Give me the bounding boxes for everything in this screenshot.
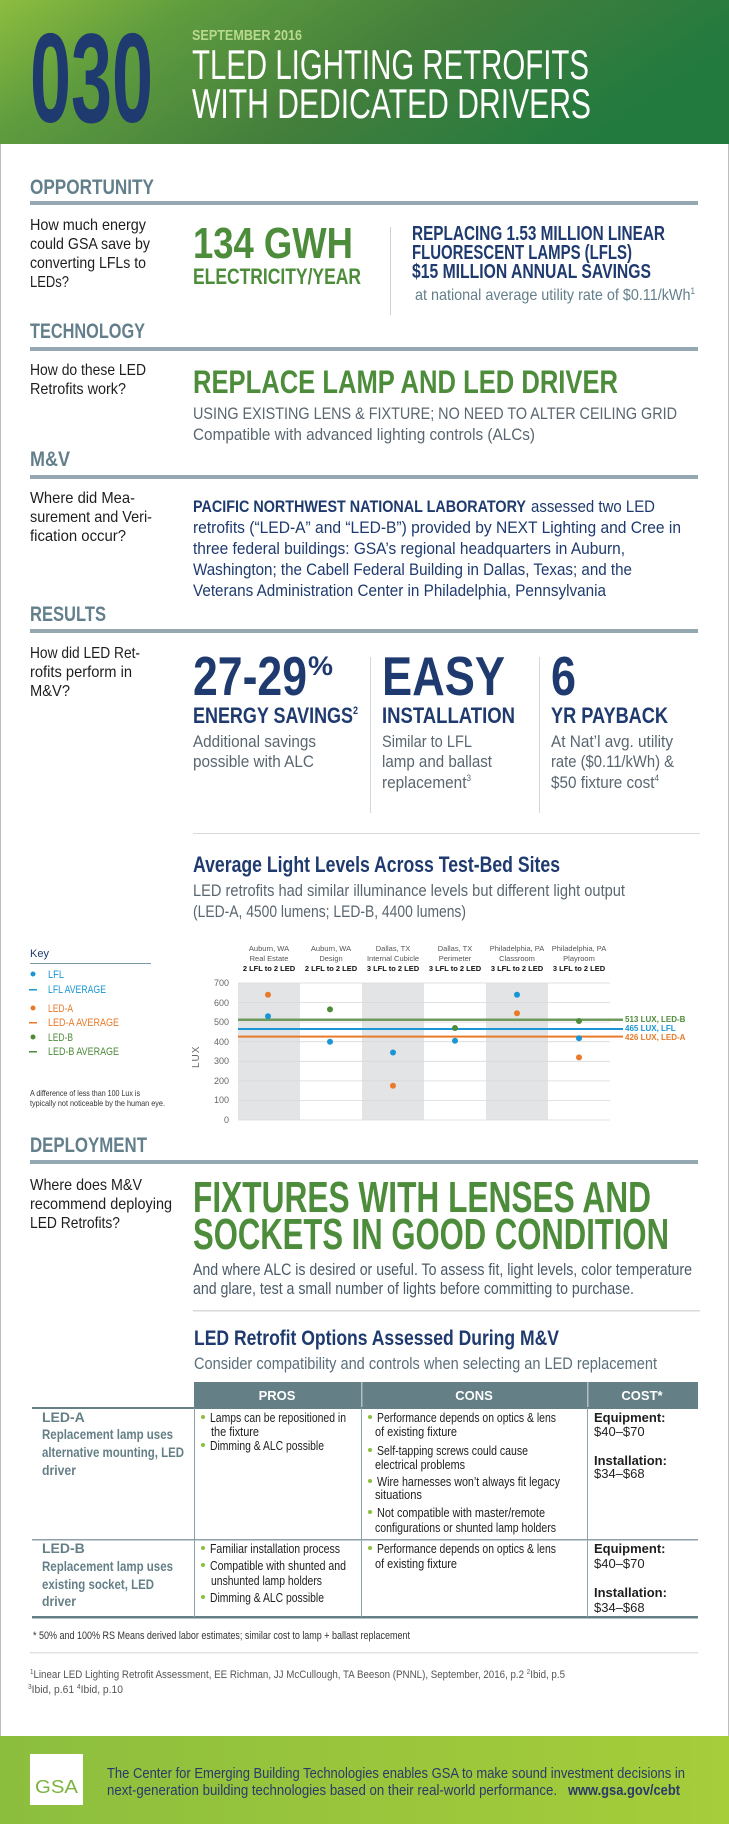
plot area: 300 bbox=[214, 1056, 229, 1066]
legend: LED-B AVERAGE bbox=[48, 1046, 119, 1058]
stat: easy installation bbox=[382, 645, 515, 792]
row: LED-B: driver bbox=[42, 1593, 76, 1609]
row: LED-A: Not compatible with master/remote bbox=[377, 1505, 545, 1520]
references: 3 bbox=[28, 1684, 32, 1691]
question: recommend deploying bbox=[30, 1196, 172, 1213]
plot area: LUX bbox=[191, 1046, 202, 1068]
table subtitle: Consider compatibility and controls when selecting an LED replacement bbox=[194, 1354, 657, 1373]
stat: energy savings: 27-29 bbox=[193, 645, 307, 707]
column headers: 2 LFL to 2 LED bbox=[305, 964, 358, 973]
question bbox=[30, 217, 150, 291]
references bbox=[28, 1669, 565, 1696]
body bbox=[193, 404, 677, 444]
header banner bbox=[0, 0, 729, 149]
stat: 134 GWH bbox=[193, 219, 361, 289]
stat: 134 GWH: 134 GWH bbox=[193, 219, 353, 268]
plot area bbox=[191, 944, 686, 1125]
row: LED-A: Equipment: bbox=[594, 1410, 666, 1425]
plot area: 426 LUX, LED-A bbox=[625, 1033, 686, 1042]
row: LED-A: Dimming & ALC possible bbox=[210, 1438, 324, 1453]
column headers: 3 LFL to 2 LED bbox=[429, 964, 482, 973]
body: three federal buildings: GSA’s regional headquarters in Auburn, bbox=[193, 539, 625, 558]
question: How did LED Ret- bbox=[30, 645, 140, 662]
legend bbox=[29, 948, 151, 1058]
question bbox=[30, 1177, 172, 1232]
section: opportunity bbox=[30, 176, 698, 315]
row: LED-B bbox=[42, 1540, 667, 1615]
question: M&V? bbox=[30, 683, 70, 700]
row: LED-B: Installation: bbox=[594, 1585, 667, 1600]
legend: LFL AVERAGE bbox=[48, 984, 106, 996]
body bbox=[193, 497, 681, 600]
references: Ibid, p.10 bbox=[81, 1684, 123, 1696]
header row: COST* bbox=[621, 1388, 664, 1403]
row: LED-B: Replacement lamp uses bbox=[42, 1558, 173, 1574]
question: How much energy bbox=[30, 217, 146, 234]
row: LED-B: of existing fixture bbox=[375, 1556, 457, 1571]
column headers: 3 LFL to 2 LED bbox=[553, 964, 606, 973]
column headers: 3 LFL to 2 LED bbox=[367, 964, 420, 973]
stat: payback: At Nat’l avg. utility bbox=[551, 732, 673, 751]
legend: LFL bbox=[48, 969, 64, 981]
row: LED-B: Familiar installation process bbox=[210, 1541, 340, 1556]
body: retrofits (“LED-A” and “LED-B”) provided by NEXT Lighting and Cree in bbox=[193, 518, 681, 537]
heading: M&V: M&V bbox=[30, 448, 70, 471]
question: fication occur? bbox=[30, 528, 126, 545]
table: LED retrofit options bbox=[32, 1327, 698, 1618]
question: Where does M&V bbox=[30, 1177, 142, 1194]
chart subtitle: LED retrofits had similar illuminance levels but different light output bbox=[193, 881, 625, 900]
header row: CONS bbox=[455, 1388, 493, 1403]
row: LED-B: Equipment: bbox=[594, 1541, 666, 1556]
question: LED Retrofits? bbox=[30, 1215, 120, 1232]
row: LED-A: $40–$70 bbox=[594, 1424, 645, 1439]
row: LED-A: Installation: bbox=[594, 1453, 667, 1468]
heading: results: RESULTS bbox=[30, 603, 106, 626]
question: LEDs? bbox=[30, 274, 69, 291]
stat: payback: rate ($0.11/kWh) & bbox=[551, 752, 675, 771]
column headers: Classroom bbox=[499, 954, 535, 963]
plot area: 400 bbox=[214, 1037, 229, 1047]
stat: lamps & savings: 1 bbox=[690, 286, 695, 296]
header row: PROS bbox=[259, 1388, 296, 1403]
row: LED-B: Compatible with shunted and bbox=[210, 1558, 346, 1573]
stat: easy installation: EASY bbox=[382, 645, 505, 707]
stat: energy savings: 2 bbox=[353, 705, 358, 717]
stat: lamps & savings bbox=[412, 223, 695, 304]
row: LED-B: existing socket, LED bbox=[42, 1576, 154, 1592]
row: LED-B: unshunted lamp holders bbox=[211, 1573, 322, 1588]
plot area: 513 LUX, LED-B bbox=[625, 1015, 686, 1024]
heading: deployment: DEPLOYMENT bbox=[30, 1134, 147, 1157]
body: Compatible with advanced lighting controls (ALCs) bbox=[193, 425, 535, 444]
stat: lamps & savings: $15 MILLION ANNUAL SAVINGS bbox=[412, 261, 651, 283]
references: Ibid, p.61 bbox=[32, 1684, 77, 1696]
date: SEPTEMBER 2016 bbox=[192, 27, 302, 44]
row: LED-A: configurations or shunted lamp holders bbox=[375, 1520, 556, 1535]
column headers bbox=[243, 944, 606, 973]
plot area: 600 bbox=[214, 998, 229, 1008]
row: LED-A: $34–$68 bbox=[594, 1466, 645, 1481]
references: 1 bbox=[30, 1669, 34, 1676]
plot area: 500 bbox=[214, 1017, 229, 1027]
references: 2 bbox=[527, 1669, 530, 1676]
row: LED-A: electrical problems bbox=[375, 1457, 465, 1472]
section: deployment bbox=[30, 1134, 700, 1312]
question: surement and Veri- bbox=[30, 509, 152, 526]
column headers: 3 LFL to 2 LED bbox=[491, 964, 544, 973]
question: How do these LED bbox=[30, 362, 146, 379]
stat: payback: 4 bbox=[654, 773, 659, 783]
body: assessed two LED bbox=[531, 497, 655, 516]
column headers: Dallas, TX bbox=[438, 944, 472, 953]
row: LED-A bbox=[42, 1409, 667, 1535]
stat: energy savings bbox=[193, 645, 358, 771]
chart subtitle bbox=[193, 881, 625, 921]
row: LED-A: the fixture bbox=[211, 1424, 259, 1439]
headline: REPLACE LAMP AND LED DRIVER bbox=[193, 364, 618, 400]
row: LED-A: LED-A bbox=[42, 1409, 85, 1425]
section: M&V bbox=[30, 448, 698, 600]
table title: LED Retrofit Options Assessed During M&V bbox=[194, 1327, 559, 1350]
note bbox=[30, 1088, 165, 1108]
stat: energy savings: Additional savings bbox=[193, 732, 316, 751]
legend: LED-A bbox=[48, 1003, 74, 1015]
body: and glare, test a small number of lights before committing to purchase. bbox=[193, 1279, 634, 1298]
row: LED-A: Self-tapping screws could cause bbox=[377, 1443, 528, 1458]
stat: payback: YR PAYBACK bbox=[551, 703, 668, 728]
section: results bbox=[30, 603, 700, 834]
row: LED-B: Dimming & ALC possible bbox=[210, 1590, 324, 1605]
row: LED-A: Wire harnesses won’t always fit legacy bbox=[377, 1474, 560, 1489]
column headers: Design bbox=[319, 954, 343, 963]
average lines bbox=[238, 1018, 623, 1021]
stat: lamps & savings: FLUORESCENT LAMPS (LFLS) bbox=[412, 242, 632, 264]
row: LED-A: situations bbox=[375, 1487, 422, 1502]
references: Ibid, p.5 bbox=[530, 1669, 565, 1681]
question: Retrofits work? bbox=[30, 381, 126, 398]
legend: Key bbox=[30, 948, 49, 960]
headline bbox=[193, 1173, 669, 1259]
chart subtitle: (LED-A, 4500 lumens; LED-B, 4400 lumens) bbox=[193, 902, 466, 921]
header row bbox=[194, 1382, 698, 1407]
footer text: next-generation building technologies based on their real-world performance. bbox=[107, 1782, 557, 1799]
icon: GSA logo bbox=[30, 1754, 83, 1805]
question: Where did Mea- bbox=[30, 490, 135, 507]
stat: easy installation: 3 bbox=[466, 773, 471, 783]
row: LED-B: Performance depends on optics & lens bbox=[377, 1541, 556, 1556]
footer text: www.gsa.gov/cebt bbox=[567, 1782, 680, 1799]
stat: easy installation: lamp and ballast bbox=[382, 752, 492, 771]
row: LED-B: $34–$68 bbox=[594, 1600, 645, 1615]
stat: payback: 6 bbox=[551, 645, 576, 707]
body: Washington; the Cabell Federal Building in Dallas, Texas; and the bbox=[193, 560, 632, 579]
plot area: 700 bbox=[214, 978, 229, 988]
column headers: Auburn, WA bbox=[249, 944, 289, 953]
footer band bbox=[0, 1736, 729, 1824]
row: LED-A: Lamps can be repositioned in bbox=[210, 1410, 346, 1425]
stat: easy installation: replacement bbox=[382, 773, 476, 792]
stat: payback bbox=[551, 645, 675, 792]
plot area: 200 bbox=[214, 1076, 229, 1086]
question bbox=[30, 645, 140, 700]
column headers: Real Estate bbox=[250, 954, 288, 963]
column headers: 2 LFL to 2 LED bbox=[243, 964, 296, 973]
body: PACIFIC NORTHWEST NATIONAL LABORATORY bbox=[193, 497, 527, 516]
row: LED-A: alternative mounting, LED bbox=[42, 1444, 184, 1460]
stat: payback: $50 fixture cost bbox=[551, 773, 666, 792]
question: converting LFLs to bbox=[30, 255, 146, 272]
question bbox=[30, 490, 152, 545]
body: Veterans Administration Center in Philadelphia, Pennsylvania bbox=[193, 581, 606, 600]
column headers: Philadelphia, PA bbox=[490, 944, 544, 953]
issue number: 030 bbox=[30, 7, 153, 149]
question: rofits perform in bbox=[30, 664, 132, 681]
plot area: 0 bbox=[224, 1115, 229, 1125]
column headers: Perimeter bbox=[439, 954, 472, 963]
row: LED-A: of existing fixture bbox=[375, 1424, 457, 1439]
icon: GSA logo: GSA bbox=[35, 1777, 78, 1797]
references: 4 bbox=[77, 1684, 81, 1691]
row: LED-A: driver bbox=[42, 1462, 76, 1478]
stat: energy savings: % bbox=[308, 651, 333, 681]
plot area: 465 LUX, LFL bbox=[625, 1024, 676, 1033]
column headers: Playroom bbox=[563, 954, 595, 963]
stat: 134 GWH: ELECTRICITY/YEAR bbox=[193, 264, 361, 289]
question: could GSA save by bbox=[30, 236, 150, 253]
title bbox=[192, 41, 591, 127]
column headers: Dallas, TX bbox=[376, 944, 410, 953]
body bbox=[193, 1260, 692, 1298]
question bbox=[30, 362, 146, 398]
chart title: Average Light Levels Across Test-Bed Sites bbox=[193, 852, 560, 877]
footer text bbox=[107, 1765, 685, 1799]
row: LED-A: Replacement lamp uses bbox=[42, 1426, 173, 1442]
heading: opportunity: OPPORTUNITY bbox=[30, 176, 154, 199]
row: LED-A: Performance depends on optics & lens bbox=[377, 1410, 556, 1425]
stat: easy installation: Similar to LFL bbox=[382, 732, 472, 751]
stat: easy installation: INSTALLATION bbox=[382, 703, 515, 728]
heading: technology: TECHNOLOGY bbox=[30, 320, 145, 343]
stat: energy savings: possible with ALC bbox=[193, 752, 314, 771]
column headers: Auburn, WA bbox=[311, 944, 351, 953]
stat: lamps & savings: at national average utility rate of $0.11/kWh bbox=[415, 287, 722, 304]
data points bbox=[265, 992, 582, 1089]
references: Linear LED Lighting Retrofit Assessment, EE Richman, JJ McCullough, TA Beeson (PNNL), September, 2016, p.2 bbox=[33, 1669, 527, 1681]
note: A difference of less than 100 Lux is bbox=[30, 1088, 140, 1098]
plot area: 100 bbox=[214, 1095, 229, 1105]
row: LED-B: $40–$70 bbox=[594, 1556, 645, 1571]
column headers: Philadelphia, PA bbox=[552, 944, 606, 953]
footnote: labor estimates: * 50% and 100% RS Means derived labor estimates; similar cost to lamp + ballast replacement bbox=[33, 1630, 410, 1642]
section: technology bbox=[30, 320, 698, 444]
chart: average light levels bbox=[29, 852, 686, 1125]
row: LED-B: LED-B bbox=[42, 1540, 85, 1556]
legend: LED-B bbox=[48, 1032, 73, 1044]
legend: LED-A AVERAGE bbox=[48, 1017, 119, 1029]
note: typically not noticeable by the human eye. bbox=[30, 1098, 165, 1108]
column headers: Internal Cubicle bbox=[367, 954, 419, 963]
stat: energy savings: ENERGY SAVINGS bbox=[193, 703, 389, 728]
